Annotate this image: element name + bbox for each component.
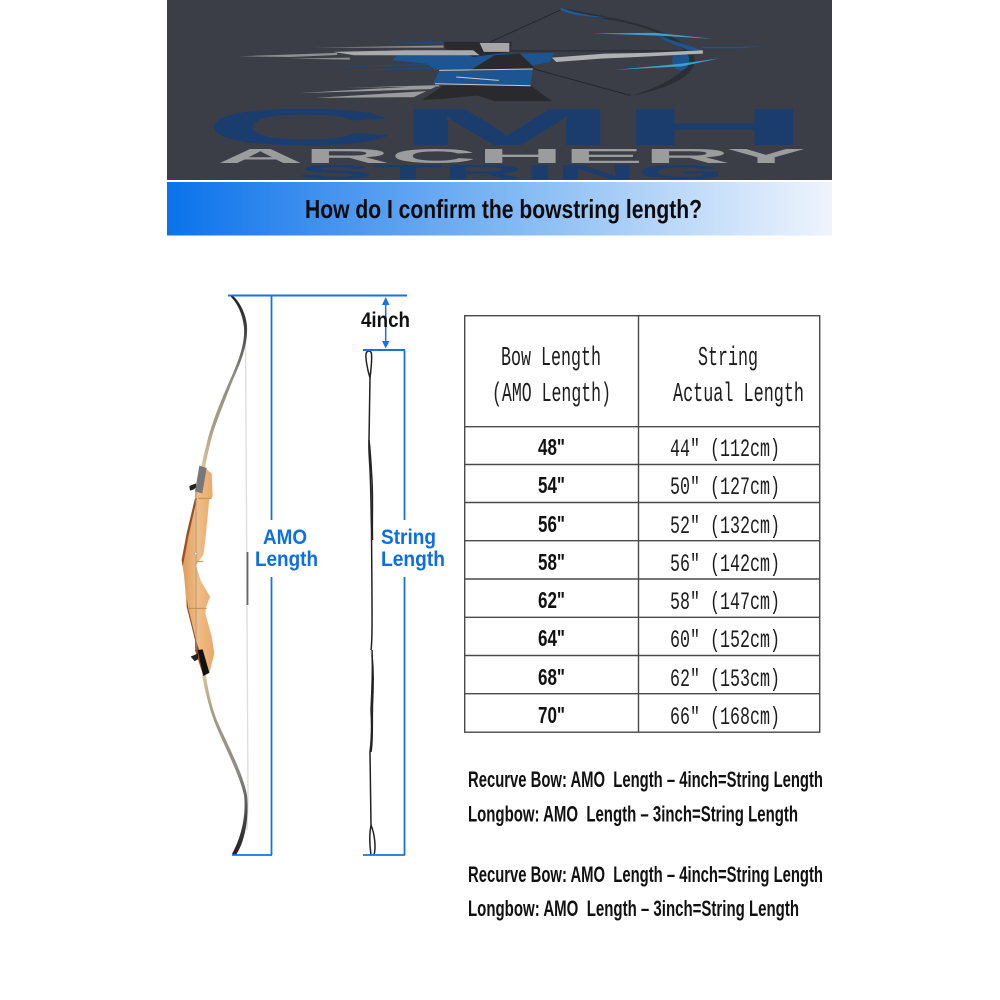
text block: formulas 1 <box>468 767 823 826</box>
heading: How do I confirm the bowstring length? <box>305 194 702 224</box>
AMO length label: AMO <box>263 526 307 549</box>
AMO length label <box>255 526 318 571</box>
text block: formulas 1: Recurve Bow: AMO Length – 4inch=String Length <box>468 767 823 792</box>
panel: title bar <box>167 182 832 236</box>
text block: formulas 2: Recurve Bow: AMO Length – 4inch=String Length <box>468 862 823 887</box>
table column: string length values: 44″ (112cm) <box>670 435 780 464</box>
table header: bow length <box>492 344 611 410</box>
logo text: CMH: CMH <box>203 99 811 157</box>
table column: bow length values: 62" <box>538 587 565 613</box>
separate bowstring <box>366 351 375 855</box>
text block: formulas 2: Longbow: AMO Length – 3inch=String Length <box>468 896 799 921</box>
table column: string length values <box>670 435 780 732</box>
table column: string length values: 52″ (132cm) <box>670 512 780 541</box>
bowstring on bow <box>246 335 248 830</box>
table column: bow length values: 58" <box>538 549 565 575</box>
table column: string length values: 66″ (168cm) <box>670 703 780 732</box>
upper grip block <box>195 466 207 493</box>
table header: string actual length <box>673 344 804 410</box>
arrow: 4 inch difference <box>382 297 390 348</box>
table header: bow length: Bow Length <box>501 344 601 374</box>
text block: formulas 1: Longbow: AMO Length – 3inch=String Length <box>468 802 798 826</box>
upper limb <box>201 296 247 468</box>
string length label <box>381 526 445 571</box>
table column: bow length values <box>538 434 565 728</box>
table header: string actual length: String <box>698 344 758 374</box>
string length label: Length <box>381 548 445 571</box>
logo text: STRING: STRING <box>298 162 725 184</box>
table grid <box>465 316 820 732</box>
lower grip block <box>198 649 209 676</box>
string length label: String <box>381 526 436 549</box>
table column: bow length values: 64" <box>538 625 565 651</box>
table column: string length values: 50″ (127cm) <box>670 473 780 502</box>
table column: bow length values: 56" <box>538 511 565 537</box>
AMO length label: Length <box>255 548 318 571</box>
table header: string actual length: Actual Length <box>673 380 804 410</box>
table column: bow length values: 48" <box>538 434 565 460</box>
table column: bow length values: 70" <box>538 702 565 728</box>
lower limb <box>202 675 248 855</box>
table column: bow length values: 68" <box>538 664 565 690</box>
table column: string length values: 62″ (153cm) <box>670 665 780 694</box>
AMO length dimension lines <box>228 296 407 855</box>
table header: bow length: (AMO Length) <box>492 380 611 410</box>
riser <box>182 466 214 676</box>
wire <box>195 492 197 650</box>
table column: string length values: 56″ (142cm) <box>670 550 780 579</box>
table column: string length values: 60″ (152cm) <box>670 626 780 655</box>
panel: logo header <box>167 0 832 184</box>
table: bow and string lengths <box>465 316 820 732</box>
infographic <box>167 0 832 920</box>
table column: bow length values: 54" <box>538 472 565 498</box>
icon: archer logo <box>239 7 765 101</box>
string length dimension lines <box>363 350 405 855</box>
text block: formulas 2 <box>468 862 823 921</box>
label: 4inch: 4inch <box>361 309 410 332</box>
logo text: ARCHERY: ARCHERY <box>217 146 810 168</box>
bow illustration <box>182 296 248 855</box>
table column: string length values: 58″ (147cm) <box>670 588 780 617</box>
